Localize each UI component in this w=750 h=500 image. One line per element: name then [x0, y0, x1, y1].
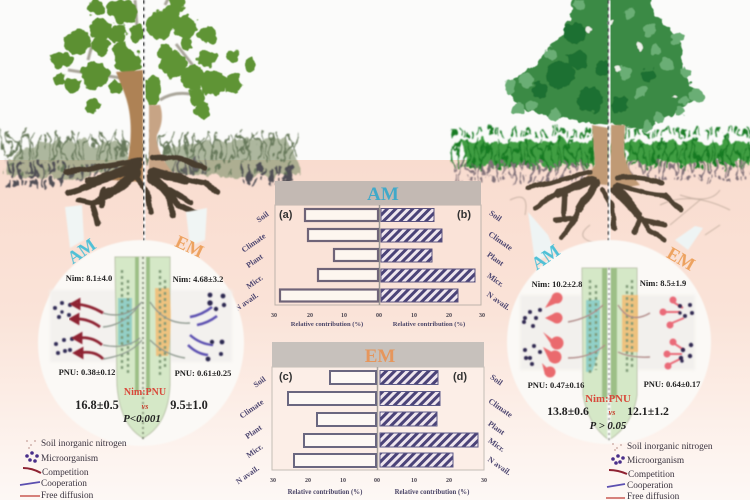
right circle values: vs: [609, 408, 615, 417]
right circle values: Nim: 8.5±1.9: [640, 278, 686, 288]
right root detail circle: [507, 240, 711, 444]
microorganisms right circle: [522, 303, 694, 366]
AM left bars: [280, 209, 378, 302]
trunk right half: [149, 105, 172, 182]
left circle values: [59, 273, 231, 425]
legend left: Microorganism: [41, 454, 99, 464]
root section: [103, 257, 190, 440]
competition icon: [23, 468, 41, 473]
cooperation icon: [607, 484, 625, 487]
AM right bars: [381, 208, 475, 302]
foliage right half: [145, 0, 255, 118]
microorganism icon: [25, 451, 39, 463]
label: right AM: AM: [528, 240, 564, 274]
dashed line left: [144, 0, 145, 250]
trunk left half: [112, 70, 143, 182]
branches left: [68, 0, 195, 100]
right circle values: PNU: 0.64±0.17: [644, 379, 701, 389]
category labels: N avail.: [485, 290, 512, 312]
EM axis ticks: 30: [481, 478, 487, 484]
AM axis ticks: 30: [271, 313, 277, 319]
right circle values: 13.8±0.6: [547, 404, 589, 418]
label: left AM: AM: [64, 234, 100, 268]
right circle values: 12.1±1.2: [627, 404, 669, 418]
panel: EM bar charts: [270, 342, 487, 496]
category labels: N avail.: [234, 464, 261, 486]
trunk right tree: [582, 125, 640, 190]
grass left: [2, 132, 300, 188]
legend right: [606, 442, 713, 500]
left root detail circle: [38, 240, 244, 446]
AM axis ticks: 20: [307, 313, 313, 319]
label: right EM: EM: [663, 243, 699, 275]
category labels: Climate: [487, 229, 514, 253]
soil zones: [520, 295, 695, 370]
free diffusion icon: [20, 495, 40, 497]
AM header: [275, 181, 481, 205]
legend left: Soil inorganic nitrogen: [41, 439, 127, 449]
competition icon: [609, 470, 627, 474]
dashed line right: [608, 0, 610, 252]
category labels: Micr.: [485, 271, 505, 289]
category labels: Climate: [240, 231, 268, 254]
AM axis titles: Relative contribution (%): [393, 321, 465, 328]
competition arrows: [71, 300, 103, 359]
legend right: Competition: [628, 470, 675, 480]
category labels: Plant: [486, 419, 507, 437]
panel label d: (d): [453, 371, 467, 383]
category labels: Micr.: [245, 442, 265, 460]
category labels: Climate: [238, 397, 266, 420]
category labels: Plant: [485, 250, 506, 268]
EM axis ticks: 20: [305, 478, 311, 484]
AM axis ticks: 00: [376, 313, 382, 319]
center axis: [378, 205, 380, 305]
category labels: Micr.: [486, 436, 506, 454]
left circle values: PNU: 0.38±0.12: [59, 367, 115, 377]
panel label a: (a): [279, 209, 293, 221]
foliage left half: [50, 0, 145, 114]
category labels: Micr.: [245, 273, 265, 291]
EM axis ticks: 00: [374, 478, 380, 484]
EM plot background: [272, 367, 484, 470]
left circle values: vs: [142, 402, 148, 411]
grass right: [450, 128, 750, 182]
AM plot background: [275, 205, 481, 305]
cooperation icon: [20, 482, 40, 485]
fine roots right tree: [510, 190, 730, 245]
microorganisms left: [53, 301, 74, 355]
AM axis ticks: 10: [411, 313, 417, 319]
foliage right tree: [504, 0, 704, 133]
category labels: Climate: [487, 396, 514, 420]
EM axis ticks: 30: [270, 478, 276, 484]
nutrient uptake arrows right: [660, 296, 684, 370]
EM left bars: [288, 371, 376, 467]
free diffusion icon: [606, 497, 625, 499]
legend left: Cooperation: [41, 479, 87, 489]
hyphae wedges left: [65, 205, 207, 248]
category labels: Plant: [244, 423, 264, 441]
circle background: [38, 240, 244, 446]
EM right bars: [380, 370, 478, 467]
AM axis ticks: 10: [341, 313, 347, 319]
panel label b: (b): [457, 209, 471, 221]
right circle values: Nim:PNU: [585, 393, 631, 405]
microorganism icon: [611, 454, 625, 465]
EM axis titles: Relative contribution (%): [288, 489, 362, 496]
circle background: [507, 240, 711, 444]
left circle values: Nim:PNU: [124, 387, 166, 398]
left illustration: AM and EM tree: [2, 0, 300, 250]
left circle values: P<0.001: [123, 413, 161, 425]
legend right: Microorganism: [627, 456, 685, 466]
legend left: Competition: [42, 468, 89, 478]
panel label c: (c): [279, 371, 293, 383]
EM axis ticks: [270, 478, 487, 484]
category labels: Soil: [255, 209, 271, 224]
left circle values: Nim: 8.1±4.0: [66, 273, 112, 283]
center axis: [376, 367, 378, 470]
label: left EM: EM: [172, 231, 207, 262]
microorganisms right: [206, 293, 226, 361]
hyphae wedges right: [528, 212, 703, 262]
EM axis ticks: 10: [340, 478, 346, 484]
right illustration: AM and EM tree: [450, 0, 750, 262]
category labels: Soil: [252, 374, 268, 389]
roots right tree: [528, 172, 680, 240]
category labels: Soil: [489, 373, 505, 388]
sky background: [0, 0, 750, 168]
category labels: N avail.: [233, 291, 260, 313]
EM header: [272, 342, 484, 367]
category labels: N avail.: [486, 455, 513, 477]
soil nitrogen icon: [612, 444, 622, 450]
category labels: Plant: [245, 252, 265, 270]
right circle values: P > 0.05: [590, 420, 627, 432]
AM axis ticks: [271, 313, 485, 319]
AM title: AM: [367, 184, 399, 205]
EM axis titles: [288, 489, 469, 496]
EM axis ticks: 20: [446, 478, 452, 484]
right circle values: PNU: 0.47±0.16: [528, 380, 584, 390]
legend right: Soil inorganic nitrogen: [627, 442, 713, 452]
right circle values: [528, 278, 701, 432]
root section: [568, 268, 650, 440]
left circle values: PNU: 0.61±0.25: [175, 368, 231, 378]
category labels: Soil: [488, 209, 504, 224]
nutrient uptake arrows left: [542, 292, 564, 378]
roots right half: [150, 157, 218, 216]
EM axis titles: Relative contribution (%): [395, 489, 469, 496]
AM axis titles: [291, 321, 465, 328]
soil background: [0, 160, 750, 500]
roots left half: [66, 160, 151, 223]
AM axis ticks: 30: [479, 313, 485, 319]
left circle values: 9.5±1.0: [170, 398, 208, 412]
legend left: [20, 439, 127, 500]
right circle values: Nim: 10.2±2.8: [532, 279, 582, 289]
left circle values: Nim: 4.68±3.2: [173, 274, 223, 284]
soil zones: [50, 290, 232, 362]
AM axis titles: Relative contribution (%): [291, 321, 363, 328]
left circle values: 16.8±0.5: [75, 398, 119, 412]
EM title: EM: [365, 346, 395, 367]
panel: AM bar charts: [271, 181, 485, 328]
cooperation arrows: [188, 307, 217, 355]
soil nitrogen icon: [26, 441, 36, 448]
legend right: Cooperation: [627, 481, 673, 491]
EM axis ticks: 10: [411, 478, 417, 484]
AM axis ticks: 20: [446, 313, 452, 319]
category labels: [233, 209, 514, 486]
